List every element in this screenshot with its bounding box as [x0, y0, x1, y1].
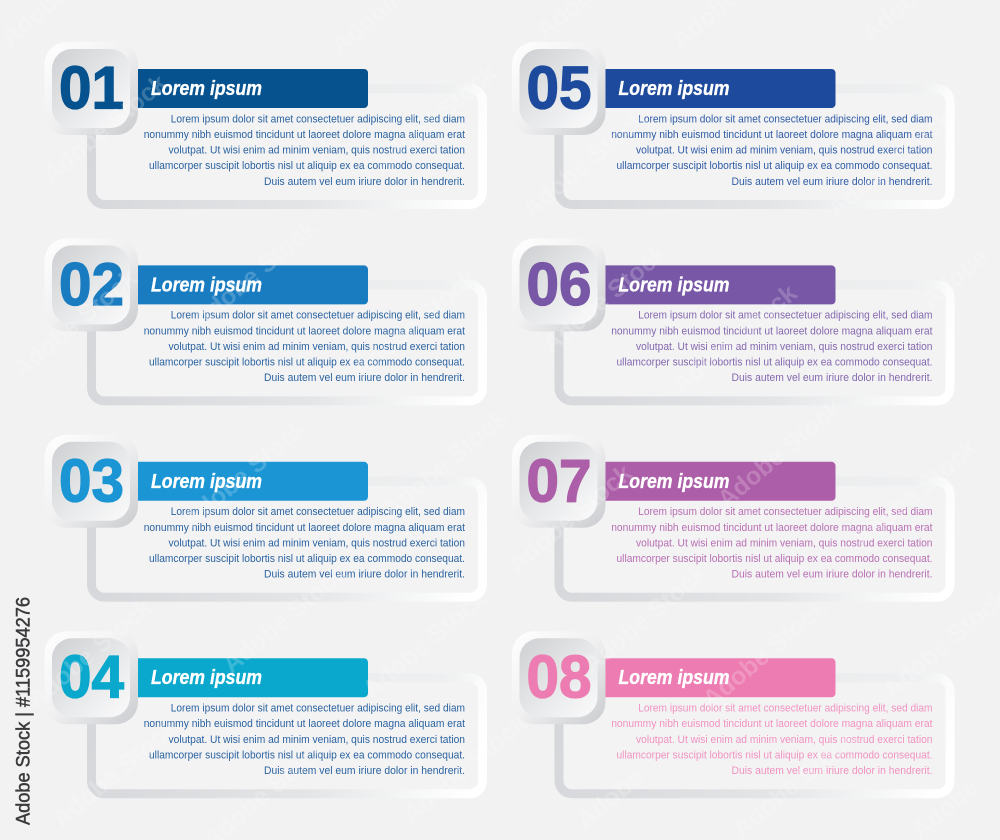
card 07: [512, 435, 950, 597]
text block 02: volutpat. Ut wisi enim ad minim veniam, quis nostrud exerci tation: [168, 341, 465, 353]
watermarks: Adobe Stock: [37, 69, 172, 189]
number 08: 08: [526, 644, 592, 711]
card 01: [44, 42, 482, 204]
watermarks: Adobe: [916, 243, 994, 315]
number 03: 03: [59, 447, 124, 514]
card 04: [44, 631, 482, 794]
title bar 08: [606, 658, 836, 697]
text block 03: Duis autem vel eum iriure dolor in hendrerit.: [264, 569, 465, 581]
text block 02: nonummy nibh euismod tincidunt ut laoreet dolore magna aliquam erat: [144, 325, 465, 337]
title 08: Lorem ipsum: [618, 667, 730, 689]
card 06: [512, 238, 950, 401]
text block 04: nonummy nibh euismod tincidunt ut laoreet dolore magna aliquam erat: [144, 718, 465, 730]
frame 03: [92, 481, 482, 597]
text block 07: Duis autem vel eum iriure dolor in hendrerit.: [732, 569, 932, 581]
title 01: Lorem ipsum: [151, 78, 262, 100]
text block 04: ullamcorper suscipit lobortis nisl ut aliquip ex ea commodo consequat.: [149, 749, 465, 761]
watermarks: Adobe Stock: [502, 459, 637, 579]
text block 05: ullamcorper suscipit lobortis nisl ut aliquip ex ea commodo consequat.: [616, 160, 932, 172]
number 02: 02: [59, 251, 124, 318]
frame 08: [559, 678, 950, 794]
watermarks: Adobe Stock: [667, 279, 802, 399]
text block 03: volutpat. Ut wisi enim ad minim veniam, quis nostrud exerci tation: [168, 537, 465, 549]
number tile 04: [44, 631, 138, 724]
text block 08: ullamcorper suscipit lobortis nisl ut aliquip ex ea commodo consequat.: [616, 749, 932, 761]
text block 08: [611, 702, 932, 777]
number tile 01: [44, 42, 138, 135]
title 05: Lorem ipsum: [618, 78, 730, 100]
watermarks: Adobe Stock: [7, 264, 142, 384]
text block 02: Duis autem vel eum iriure dolor in hendrerit.: [264, 372, 465, 384]
watermarks: Adobe Stock: [397, 709, 532, 829]
side credit: Adobe Stock | #1159954276: [12, 597, 34, 825]
text block 06: Lorem ipsum dolor sit amet consectetuer adipiscing elit, sed diam: [638, 310, 932, 322]
number 01: 01: [59, 54, 124, 122]
card 03: [44, 435, 482, 597]
watermarks: Adobe: [571, 763, 649, 835]
text block 01: Duis autem vel eum iriure dolor in hendrerit.: [264, 176, 465, 188]
watermarks: Adobe Stock: [697, 594, 832, 714]
title 04: Lorem ipsum: [151, 667, 262, 689]
text block 03: Lorem ipsum dolor sit amet consectetuer adipiscing elit, sed diam: [171, 506, 465, 518]
title bar 04: [138, 658, 368, 697]
text block 03: ullamcorper suscipit lobortis nisl ut aliquip ex ea commodo consequat.: [149, 553, 465, 565]
title 03: Lorem ipsum: [151, 471, 262, 493]
card 02: [44, 238, 482, 401]
text block 01: Lorem ipsum dolor sit amet consectetuer adipiscing elit, sed diam: [171, 113, 465, 125]
text block 07: volutpat. Ut wisi enim ad minim veniam, quis nostrud exerci tation: [636, 537, 932, 549]
text block 02: Lorem ipsum dolor sit amet consectetuer adipiscing elit, sed diam: [171, 310, 465, 322]
watermarks: Adobe Stock: [177, 414, 312, 534]
watermarks: Adobe Stock: [537, 239, 672, 359]
text block 05: nonummy nibh euismod tincidunt ut laoreet dolore magna aliquam erat: [611, 129, 932, 141]
text block 08: Duis autem vel eum iriure dolor in hendrerit.: [732, 765, 932, 777]
text block 06: [611, 310, 932, 384]
card 08: [512, 631, 950, 794]
text block 03: [144, 506, 465, 581]
number tile 05: [512, 42, 606, 135]
watermarks: Adobe Stock: [357, 584, 492, 704]
number tile 02: [44, 238, 138, 331]
number 05: 05: [526, 54, 592, 122]
number tile 06: [512, 238, 606, 331]
number 07: 07: [526, 447, 592, 514]
text block 03: nonummy nibh euismod tincidunt ut laoreet dolore magna aliquam erat: [144, 522, 465, 534]
frame 04: [92, 678, 482, 794]
number 04: 04: [59, 644, 125, 711]
text block 01: ullamcorper suscipit lobortis nisl ut aliquip ex ea commodo consequat.: [149, 160, 465, 172]
watermarks: Adobe Stock: [367, 59, 502, 179]
title bar 07: [606, 462, 836, 501]
text block 01: nonummy nibh euismod tincidunt ut laoreet dolore magna aliquam erat: [144, 129, 465, 141]
card 05: [512, 42, 950, 204]
watermarks: Adobe Stock: [517, 104, 652, 224]
text block 07: ullamcorper suscipit lobortis nisl ut aliquip ex ea commodo consequat.: [616, 553, 932, 565]
watermarks: Adobe Stock: [22, 594, 157, 714]
title bar 06: [606, 265, 836, 304]
text block 05: volutpat. Ut wisi enim ad minim veniam, quis nostrud exerci tation: [636, 145, 932, 157]
frame 06: [559, 285, 950, 401]
number tile 08: [512, 631, 606, 724]
text block 02: ullamcorper suscipit lobortis nisl ut aliquip ex ea commodo consequat.: [149, 357, 465, 369]
title 06: Lorem ipsum: [618, 274, 730, 296]
text block 04: Duis autem vel eum iriure dolor in hendrerit.: [264, 765, 465, 777]
number tile 03: [44, 435, 138, 528]
text block 05: Lorem ipsum dolor sit amet consectetuer adipiscing elit, sed diam: [638, 113, 932, 125]
number tile 07: [512, 435, 606, 528]
watermarks: Adobe Stock: [377, 404, 512, 524]
title bar 01: [138, 69, 368, 108]
text block 07: [611, 506, 932, 581]
text block 08: nonummy nibh euismod tincidunt ut laoreet dolore magna aliquam erat: [611, 718, 932, 730]
frame 02: [92, 285, 482, 401]
text block 08: volutpat. Ut wisi enim ad minim veniam, quis nostrud exerci tation: [636, 734, 932, 746]
text block 06: Duis autem vel eum iriure dolor in hendrerit.: [732, 372, 932, 384]
watermarks: Adobe Stock: [847, 434, 982, 554]
text block 07: nonummy nibh euismod tincidunt ut laoreet dolore magna aliquam erat: [611, 522, 932, 534]
watermarks: Adobe Stock: [187, 214, 322, 334]
title bar 02: [138, 265, 368, 304]
watermarks: Adobe Stock: [347, 264, 482, 384]
text block 05: [611, 113, 932, 188]
number 06: 06: [526, 251, 592, 318]
title 07: Lorem ipsum: [618, 471, 730, 493]
frame 07: [559, 481, 950, 597]
text block 04: Lorem ipsum dolor sit amet consectetuer adipiscing elit, sed diam: [171, 703, 465, 715]
text block 06: volutpat. Ut wisi enim ad minim veniam, quis nostrud exerci tation: [636, 341, 932, 353]
frame 05: [559, 88, 950, 204]
watermarks: Adobe Stock: [217, 559, 352, 679]
frame 01: [92, 88, 482, 204]
text block 08: Lorem ipsum dolor sit amet consectetuer adipiscing elit, sed diam: [638, 703, 932, 715]
title bar 05: [606, 69, 836, 108]
text block 04: [144, 702, 465, 777]
watermarks: Adobe Stock: [47, 714, 182, 834]
watermarks: Adobe Stock: [822, 104, 957, 224]
text block 06: ullamcorper suscipit lobortis nisl ut aliquip ex ea commodo consequat.: [616, 357, 932, 369]
text block 01: volutpat. Ut wisi enim ad minim veniam, quis nostrud exerci tation: [168, 145, 465, 157]
watermarks: Adobe Stock: [712, 394, 847, 514]
text block 02: [144, 310, 465, 384]
text block 04: volutpat. Ut wisi enim ad minim veniam, quis nostrud exerci tation: [168, 734, 465, 746]
text block 06: nonummy nibh euismod tincidunt ut laoreet dolore magna aliquam erat: [611, 325, 932, 337]
text block 01: [144, 113, 465, 188]
text block 07: Lorem ipsum dolor sit amet consectetuer adipiscing elit, sed diam: [638, 506, 932, 518]
text block 05: Duis autem vel eum iriure dolor in hendrerit.: [732, 176, 932, 188]
title bar 03: [138, 462, 368, 501]
watermarks: Adobe Stock: [577, 559, 712, 679]
title 02: Lorem ipsum: [151, 274, 262, 296]
